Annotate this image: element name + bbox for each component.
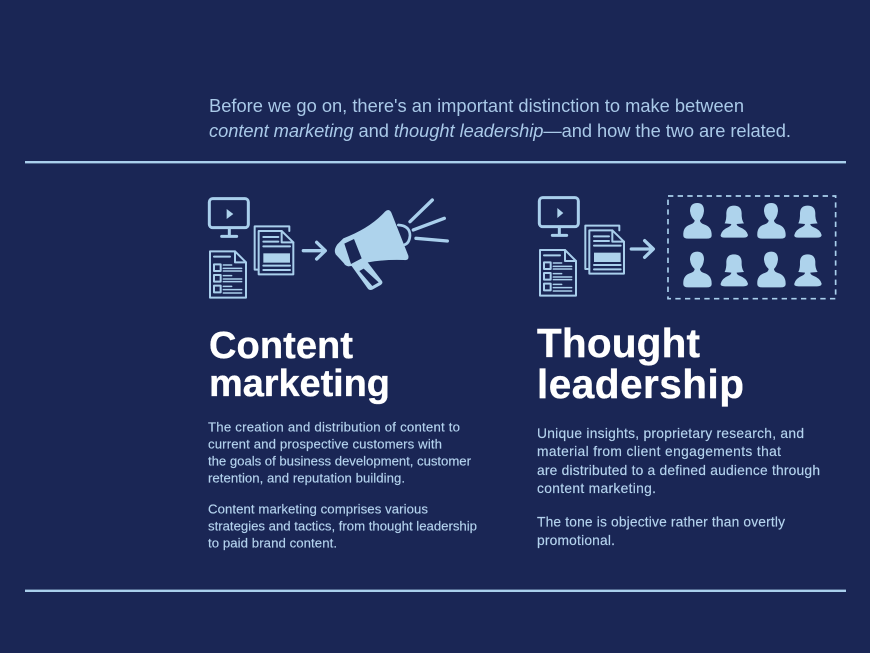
text block: content marketing definition: current and prospective customers with	[208, 436, 442, 452]
icon: female person	[794, 254, 822, 286]
icon: male person	[757, 252, 786, 287]
icon: monitor	[209, 199, 248, 236]
heading: content marketing: Content	[209, 325, 353, 367]
icon: monitor	[539, 198, 578, 235]
icon: megaphone	[335, 200, 447, 290]
text block: thought leadership definition: Unique insights, proprietary research, and	[537, 426, 804, 441]
heading: thought leadership: leadership	[537, 361, 744, 407]
panel: thought leadership	[537, 196, 836, 548]
text block: content marketing definition: The creation and distribution of content to	[208, 420, 460, 434]
intro text: content marketing and thought leadership—and how the two are related.	[209, 120, 791, 141]
text block: thought leadership definition	[537, 426, 820, 496]
icon: female person	[721, 206, 748, 238]
text block: content marketing definition	[208, 420, 472, 486]
text block: content marketing scope	[208, 502, 477, 550]
icon: source documents and arrow	[209, 199, 325, 298]
heading: thought leadership	[537, 320, 744, 407]
heading: content marketing	[209, 325, 390, 405]
text block: content marketing scope: Content marketing comprises various	[208, 502, 428, 516]
text block: thought leadership definition: content marketing.	[537, 481, 656, 496]
heading: content marketing: marketing	[209, 363, 390, 405]
icon: document with bar	[585, 226, 624, 274]
text block: thought leadership tone: promotional.	[537, 533, 615, 548]
icon: document with checklist	[210, 251, 246, 298]
text block: thought leadership definition: are distributed to a defined audience through	[537, 463, 820, 478]
icon: male person	[683, 203, 712, 239]
icon: arrow	[303, 242, 325, 259]
icon: male person	[757, 203, 786, 239]
icon: male person	[683, 252, 712, 287]
text block: thought leadership definition: material from client engagements that	[537, 444, 781, 459]
intro text	[209, 95, 791, 141]
icon: document with bar	[255, 226, 293, 274]
icon: female person	[721, 254, 748, 286]
panel: content marketing	[208, 199, 477, 551]
heading: thought leadership: Thought	[537, 320, 700, 366]
intro text: Before we go on, there's an important distinction to make between	[209, 95, 744, 116]
text block: thought leadership tone	[537, 514, 785, 548]
text block: thought leadership tone: The tone is objective rather than overtly	[537, 514, 785, 530]
icon: audience box	[668, 196, 836, 299]
text block: content marketing scope: strategies and tactics, from thought leadership	[208, 518, 477, 534]
icon: content to audience	[539, 196, 836, 299]
text block: content marketing definition: the goals of business development, customer	[208, 454, 472, 468]
icon: female person	[794, 206, 822, 238]
text block: content marketing definition: retention, and reputation building.	[208, 470, 405, 486]
text block: content marketing scope: to paid brand content.	[208, 536, 337, 550]
icon: document with checklist	[540, 250, 576, 296]
icon: content to megaphone	[209, 199, 447, 298]
icon: arrow	[631, 241, 653, 257]
